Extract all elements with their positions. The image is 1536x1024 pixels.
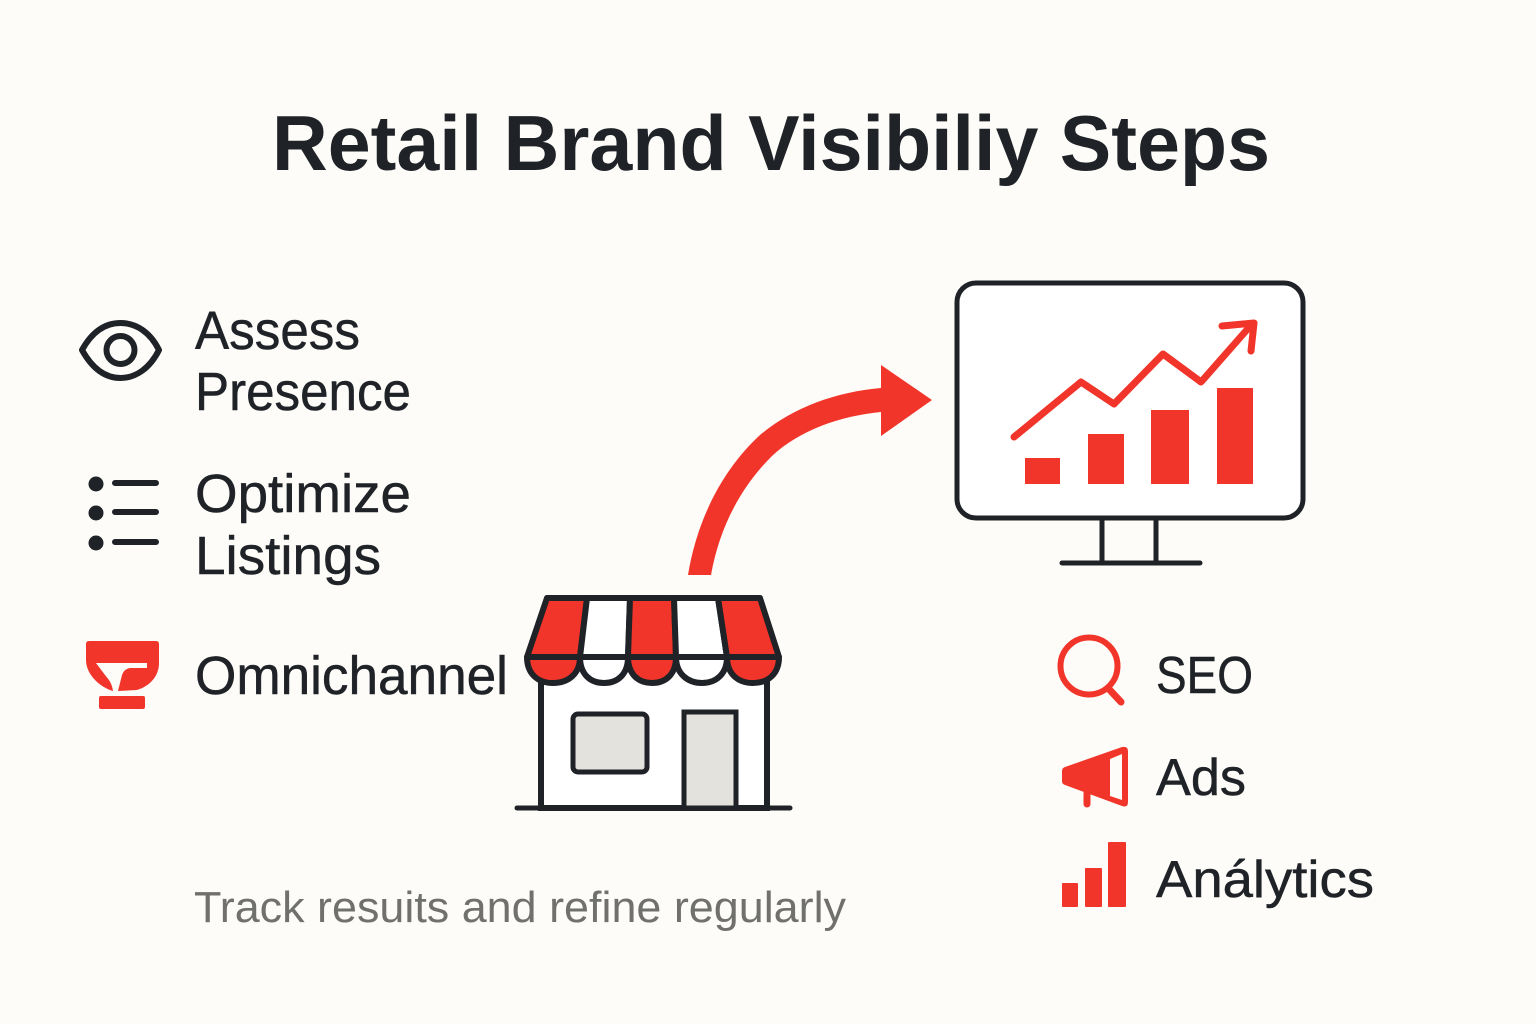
- label: omnichannel: Omnichannel: [195, 646, 508, 706]
- item: seo: [1060, 638, 1253, 705]
- growth arrow: [688, 365, 932, 575]
- step: omnichannel: [86, 641, 508, 709]
- label: assess presence: [195, 301, 411, 422]
- monitor stand: [1062, 518, 1200, 563]
- striped awning: [527, 598, 779, 683]
- illustration: monitor with growth chart: [957, 283, 1303, 563]
- store door: [684, 712, 736, 808]
- icon: list: [88, 476, 156, 550]
- label: optimize listings: Optimize: [195, 464, 411, 524]
- step: optimize listings: [88, 464, 411, 586]
- bar chart: [1025, 388, 1253, 484]
- ground line: [517, 806, 790, 810]
- label: analytics: Análytics: [1156, 851, 1374, 909]
- item: ads: [1062, 747, 1246, 807]
- footer note: Track resuits and refine regularly: [194, 883, 846, 932]
- item: analytics: [1062, 842, 1374, 909]
- icon: omnichannel: [86, 641, 159, 709]
- store body: [541, 680, 767, 808]
- title: Retail Brand Visibiliy Steps: [272, 99, 1270, 187]
- step: assess presence: [82, 301, 411, 422]
- label: assess presence: Presence: [195, 362, 411, 422]
- monitor screen: [957, 283, 1303, 518]
- icon: bars: [1062, 842, 1126, 907]
- icon: magnifier: [1060, 638, 1121, 702]
- label: assess presence: Assess: [195, 301, 360, 361]
- illustration: storefront: [517, 598, 790, 808]
- label: optimize listings: Listings: [195, 526, 381, 586]
- label: ads: Ads: [1156, 749, 1246, 807]
- icon: megaphone: [1062, 747, 1128, 806]
- label: optimize listings: [195, 464, 411, 586]
- label: seo: SEO: [1156, 647, 1253, 705]
- icon: eye: [82, 323, 159, 378]
- store window: [573, 714, 647, 772]
- trend line arrow: [1014, 323, 1254, 437]
